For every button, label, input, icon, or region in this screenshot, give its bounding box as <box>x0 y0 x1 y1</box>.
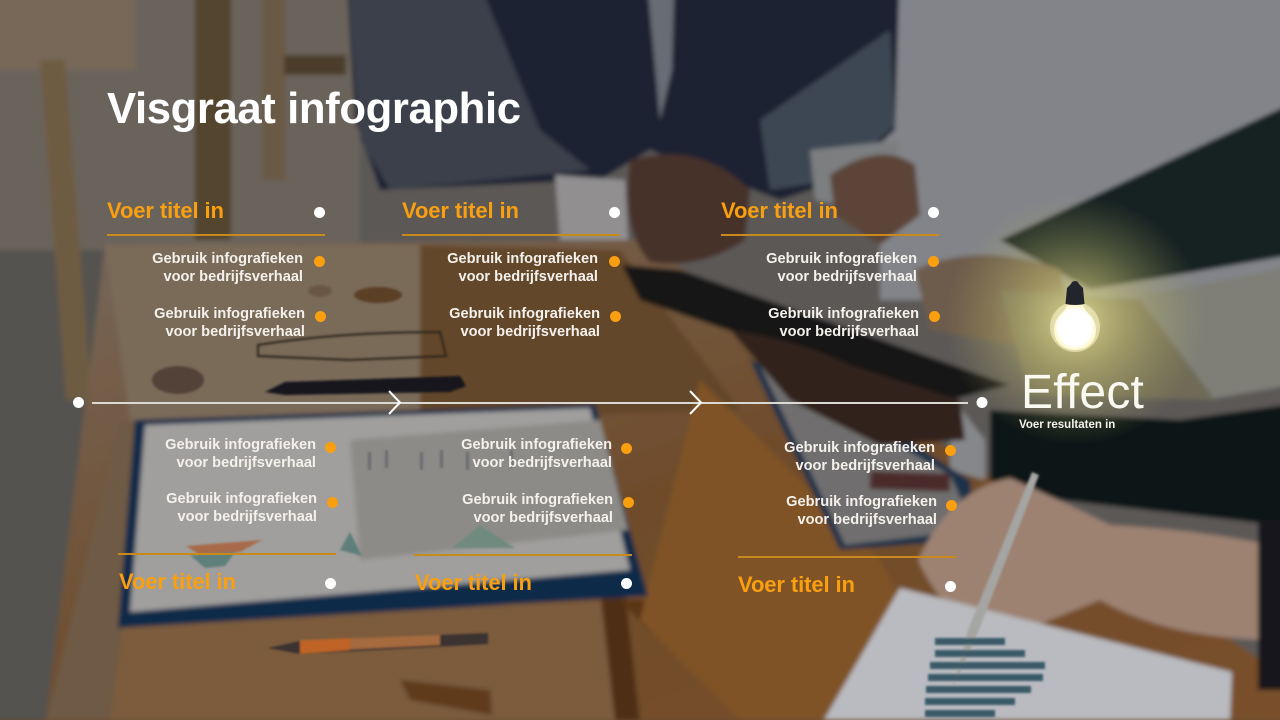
glasses <box>258 332 446 360</box>
cause block: top 3 <box>721 198 940 340</box>
title: Visgraat infographic <box>107 84 521 133</box>
heading: Voer titel in <box>415 570 532 595</box>
icon: light bulb <box>1050 281 1100 352</box>
item: voor bedrijfsverhaal <box>795 458 935 474</box>
item: Gebruik infografieken <box>154 306 305 322</box>
item: Gebruik infografieken <box>766 251 917 267</box>
chart marks on clipboard <box>186 540 262 555</box>
item <box>461 437 612 471</box>
effect heading: Effect <box>1021 366 1144 419</box>
item: voor bedrijfsverhaal <box>472 455 612 471</box>
item <box>447 251 598 285</box>
item <box>152 251 303 285</box>
item: voor bedrijfsverhaal <box>779 324 919 340</box>
item: Gebruik infografieken <box>786 494 937 510</box>
cause block: top 1 <box>107 198 326 340</box>
cause block: bottom 2 <box>414 437 634 595</box>
orange pen <box>268 633 488 654</box>
black pen <box>265 376 466 395</box>
item: Gebruik infografieken <box>449 306 600 322</box>
heading: Voer titel in <box>402 198 519 223</box>
item <box>768 306 919 340</box>
item <box>449 306 600 340</box>
suit <box>345 0 900 200</box>
item: Gebruik infografieken <box>462 492 613 508</box>
item: voor bedrijfsverhaal <box>473 510 613 526</box>
blue report bars <box>925 638 1045 717</box>
spine arrow <box>73 390 988 415</box>
item: voor bedrijfsverhaal <box>177 509 317 525</box>
item: voor bedrijfsverhaal <box>777 269 917 285</box>
report page <box>824 588 1232 720</box>
item: Gebruik infografieken <box>768 306 919 322</box>
item <box>166 491 317 525</box>
paper behind bulb <box>1125 260 1280 400</box>
documents on right <box>750 360 975 550</box>
right sleeve <box>1000 90 1280 290</box>
cause block: bottom 3 <box>738 440 957 597</box>
item: Gebruik infografieken <box>447 251 598 267</box>
heading: Voer titel in <box>721 198 838 223</box>
heading: Voer titel in <box>107 198 224 223</box>
tablet <box>622 265 1010 400</box>
cause block: bottom 1 <box>118 437 338 594</box>
item: Gebruik infografieken <box>784 440 935 456</box>
table <box>46 240 1280 720</box>
item: voor bedrijfsverhaal <box>797 512 937 528</box>
item: voor bedrijfsverhaal <box>458 269 598 285</box>
item <box>165 437 316 471</box>
heading: Voer titel in <box>119 569 236 594</box>
heading: Voer titel in <box>738 572 855 597</box>
item <box>154 306 305 340</box>
item: Gebruik infografieken <box>165 437 316 453</box>
clipboard <box>118 404 648 628</box>
item <box>784 440 935 474</box>
hand with pen bottom right <box>918 478 1280 640</box>
item <box>766 251 917 285</box>
item: Gebruik infografieken <box>152 251 303 267</box>
item: voor bedrijfsverhaal <box>176 455 316 471</box>
item: voor bedrijfsverhaal <box>165 324 305 340</box>
item <box>462 492 613 526</box>
item <box>786 494 937 528</box>
pencil <box>952 472 1039 690</box>
cause block: top 2 <box>402 198 621 340</box>
light glow behind bulb <box>960 204 1184 438</box>
stool legs <box>0 0 135 70</box>
item: voor bedrijfsverhaal <box>163 269 303 285</box>
item: voor bedrijfsverhaal <box>460 324 600 340</box>
hands <box>628 154 750 264</box>
item: Gebruik infografieken <box>166 491 317 507</box>
item: Gebruik infografieken <box>461 437 612 453</box>
effect subtext: Voer resultaten in <box>1019 419 1115 431</box>
